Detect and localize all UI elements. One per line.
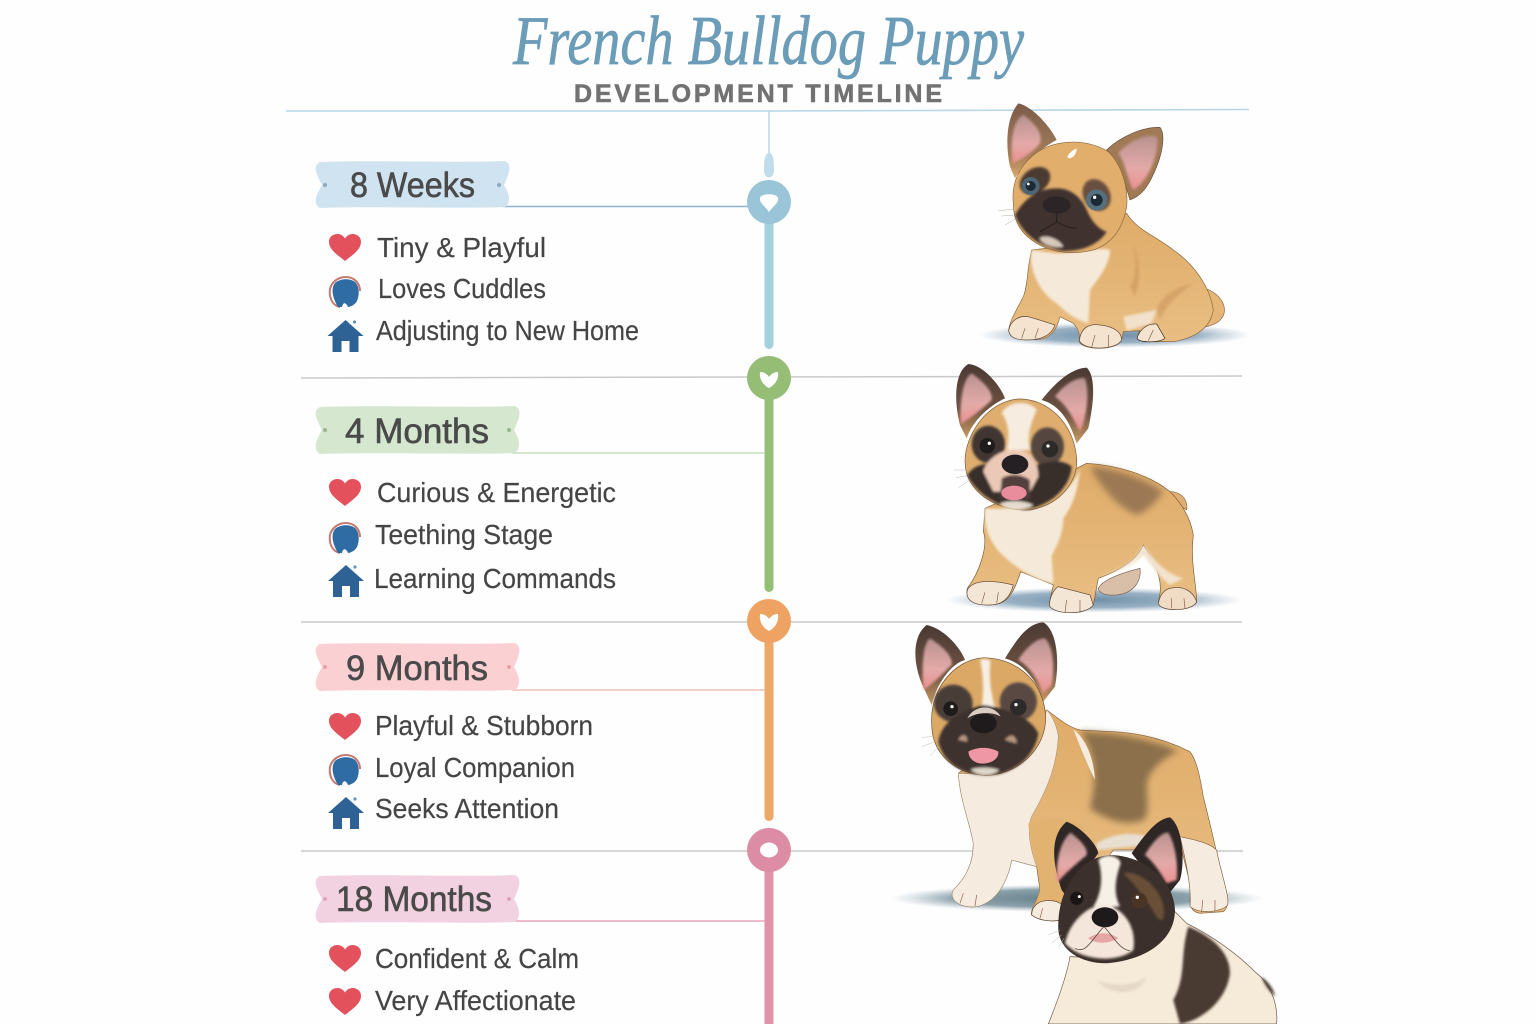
illustration: 9 month dog	[890, 622, 1263, 921]
panel: 9 months	[316, 643, 765, 829]
connector line	[512, 920, 765, 922]
ribbon	[316, 643, 519, 691]
node: 8 weeks	[747, 180, 791, 224]
illustration: 4 month puppy	[945, 364, 1242, 613]
age heading: 4 Months	[345, 412, 489, 451]
node: 4 months	[747, 356, 791, 400]
trait: Very Affectionate	[375, 985, 576, 1016]
trait: Curious & Energetic	[377, 477, 616, 508]
icon: heart	[329, 479, 361, 506]
panel: 8 weeks	[316, 161, 748, 352]
trait: Playful & Stubborn	[375, 710, 593, 741]
illustration: 18 month dog	[1048, 817, 1277, 1024]
ribbon	[316, 161, 509, 208]
age heading: 8 Weeks	[350, 166, 475, 205]
subtitle: DEVELOPMENT TIMELINE	[574, 80, 942, 108]
icon: heart	[329, 945, 361, 972]
trait: Adjusting to New Home	[376, 315, 639, 346]
node: 18 months	[747, 828, 791, 872]
connector line	[503, 206, 748, 208]
icon: heart	[329, 234, 361, 261]
icon: house	[328, 797, 364, 829]
spine: 8 weeks bar	[764, 218, 774, 349]
trait: Learning Commands	[374, 563, 616, 594]
trait: Loves Cuddles	[378, 273, 546, 304]
icon: house	[328, 565, 364, 597]
trait: Loyal Companion	[375, 752, 575, 783]
icon: cuddle	[330, 523, 360, 553]
spine: 4 months bar	[764, 395, 774, 592]
icon: house	[328, 320, 364, 352]
timeline spine	[747, 111, 791, 1024]
trait: Tiny & Playful	[377, 232, 546, 263]
icon: cuddle	[330, 755, 360, 785]
panel: 18 months	[316, 875, 765, 1016]
connector line	[512, 452, 765, 454]
age heading: 18 Months	[336, 880, 492, 919]
icon: heart	[329, 713, 361, 740]
panel: 4 months	[316, 406, 765, 597]
age heading: 9 Months	[346, 649, 488, 688]
trait: Seeks Attention	[375, 793, 559, 824]
icon: cuddle	[330, 277, 360, 307]
ribbon	[316, 406, 519, 454]
spine: top stem	[764, 111, 774, 178]
illustration: 8 week puppy	[978, 103, 1252, 348]
title: French Bulldog Puppy	[512, 3, 1025, 80]
ribbon	[316, 875, 519, 923]
icon: heart	[329, 988, 361, 1015]
spine: 18 months bar	[764, 866, 774, 1024]
node: 9 months	[747, 599, 791, 643]
trait: Teething Stage	[375, 519, 553, 550]
connector line	[512, 689, 765, 691]
trait: Confident & Calm	[375, 943, 579, 974]
spine: 9 months bar	[764, 638, 774, 821]
